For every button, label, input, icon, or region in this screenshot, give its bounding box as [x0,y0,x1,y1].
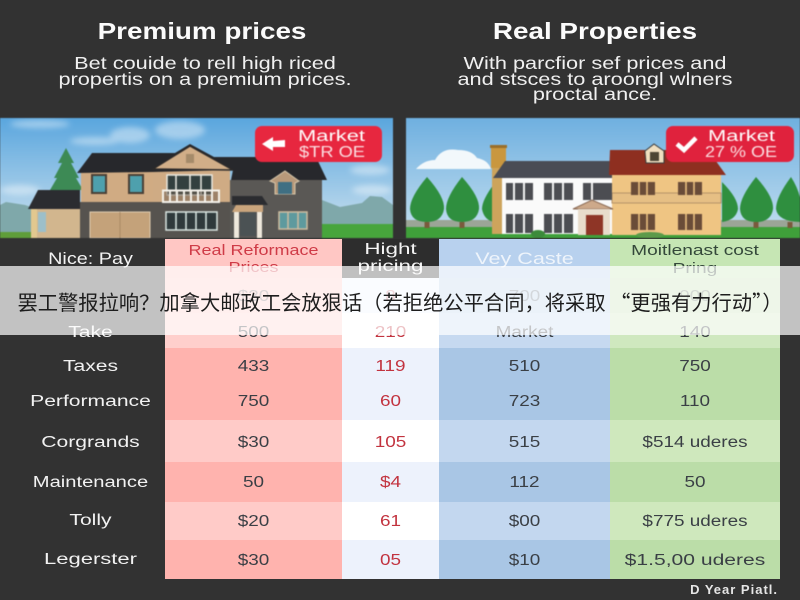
shrubs [531,230,545,238]
lower window [166,212,217,230]
entry [232,205,263,212]
row: Maintenance: Maintenance [33,474,148,491]
header: Real Reformace Prices: Prices [229,260,278,276]
header: Hight pricing: pricing [357,258,423,275]
callout: Market badge: 27 % OE [705,144,777,161]
row: Tolly: Tolly [69,512,112,529]
row: Maintenance [33,474,706,491]
row: Performance: 723 [509,393,540,410]
text: Premium prices description: propertis on a premium prices. [58,68,352,88]
row: Performance: 60 [380,393,401,410]
chimney [491,146,506,168]
row: Legerster: $10 [509,552,540,568]
cloud [416,149,491,169]
row: Take: 210 [375,324,406,340]
comparison table [30,239,780,579]
header: Moitlenast cost Pring [631,243,759,277]
row: Taxes: 750 [679,358,711,375]
row: Taxes: 119 [375,358,406,375]
row: Taxes [63,358,711,375]
row: Performance [30,393,710,410]
callout: Market badge: $TR OE [299,144,365,161]
text: Premium prices description: Bet couide to rell high riced [74,53,336,73]
icon: check mark [677,138,696,150]
trees [410,177,800,222]
row: Take: Take [68,324,113,340]
row: Corgrands: $30 [238,434,269,451]
row: Maintenance: 50 [243,474,264,491]
row: Tolly [69,512,748,530]
heading: Real Properties: Real Properties [493,18,697,44]
garage [90,212,150,238]
tree [50,148,83,190]
tan upper [81,172,154,202]
callout: Market badge: Market [708,128,776,145]
row: Take: 500 [238,324,269,340]
row: Maintenance: $4 [380,474,401,491]
header: Hight pricing [357,241,423,275]
row: Tolly: $20 [238,513,269,530]
dormer [645,144,664,163]
row: Performance: 750 [238,393,269,410]
text: Real Properties description: With parcfior sef prices and [464,53,726,73]
row: Take: Market [496,324,553,340]
row: Tolly: 61 [380,513,401,530]
row: Maintenance: 112 [509,474,540,491]
illustration: premium house scene [0,117,394,239]
header: Nice: Pay: Nice: Pay [48,250,133,268]
icon: left arrow [262,137,285,151]
yellow wing [612,175,721,235]
lower dark storey [80,202,230,238]
text: Real Properties description [457,53,733,104]
header: Moitlenast cost Pring: Pring [673,261,717,277]
illustration: real property house scene [405,117,800,238]
white wing [498,178,613,234]
white wing windows [506,183,612,233]
row: Taxes: 433 [238,358,269,375]
row: Tolly: $00 [509,513,540,530]
callout: Market badge [255,126,382,162]
row: Tolly: $775 uderes [642,513,748,530]
entry [573,200,613,209]
row: Legerster: $30 [238,552,269,568]
banner: headline overlay [0,266,800,335]
row: Corgrands: 515 [509,434,540,451]
row: Performance: 110 [680,393,710,410]
footer note: D Year Piatl. [690,582,778,597]
callout: Market badge: Market [298,128,366,145]
row: Performance: Performance [30,393,151,410]
row: Legerster: 05 [380,552,401,568]
header: Real Reformace Prices [189,243,318,276]
row: Corgrands [41,434,748,451]
row: Legerster: Legerster [44,550,137,568]
heading: Premium prices: Premium prices [98,18,306,44]
header: Moitlenast cost Pring: Moitlenast cost [631,243,759,259]
header: Real Reformace Prices: Real Reformace [189,243,318,259]
banner: headline overlay: 罢工警报拉响？加拿大邮政工会放狠话（若拒绝公平合同，将采取 “更强有力行动”） [17,286,783,316]
row: partly hidden values: $30 [238,288,269,304]
row: partly hidden values [238,288,711,304]
text: Premium prices description [58,53,352,88]
text: Real Properties description: proctal ance. [533,84,657,104]
row: Legerster [44,550,765,568]
dormer [270,171,299,194]
callout: Market badge [666,126,794,162]
balcony [162,190,220,203]
row: Legerster: $1.5,00 uderes [625,552,765,568]
yellow wing windows [631,182,702,230]
row: Taxes: 510 [509,358,540,375]
row: partly hidden values: 700 [509,288,540,304]
row: Corgrands: $514 uderes [642,434,748,451]
row: Corgrands: Corgrands [41,434,140,451]
row: partly hidden values: 900 [679,288,711,304]
text: Real Properties description: and stsces to aroongl wlners [457,68,733,88]
row: Corgrands: 105 [375,434,406,451]
row: Maintenance: 50 [684,474,706,491]
row: Taxes: Taxes [63,358,118,375]
roofs [77,144,327,180]
carport [28,190,80,209]
row: Take [68,324,711,340]
row: Take: 140 [679,324,711,340]
header: Hight pricing: Hight [364,241,417,258]
upper windows [92,175,106,193]
header: Very Caste: Vey Caste [475,248,574,268]
row: partly hidden values: 8 [385,288,396,304]
